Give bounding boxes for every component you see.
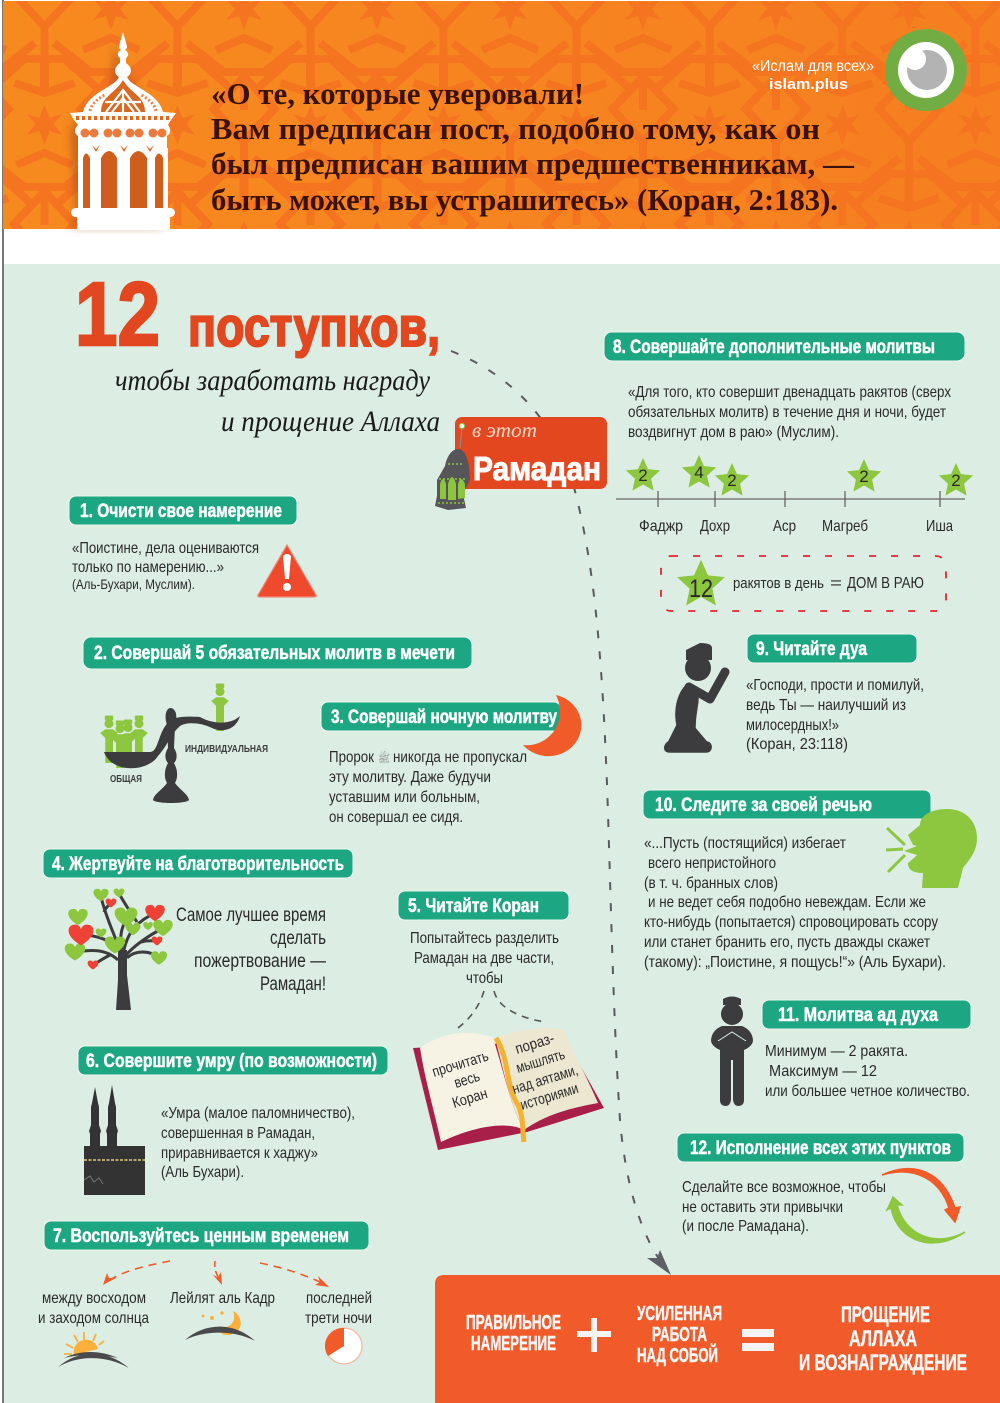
formula result: АЛЛАХА — [849, 1326, 917, 1351]
subtitle: чтобы заработать награду — [115, 364, 431, 397]
prayer timeline: Фаджр — [639, 518, 683, 535]
item 12 text: (и после Рамадана). — [682, 1218, 809, 1235]
item 12 — [677, 1133, 965, 1243]
item 7 labels: последней — [306, 1290, 372, 1307]
item 4 text: Самое лучшее время — [176, 905, 326, 926]
item 7 labels: и заходом солнца — [38, 1310, 149, 1327]
item 10 text: кто-нибудь (попытается) спровоцировать ссору — [644, 914, 938, 931]
callout: 12 rakats: 12 — [689, 575, 713, 603]
logo label: «Ислам для всех» — [752, 58, 874, 75]
icon: open book: прочитать — [430, 1048, 491, 1081]
item 10 — [643, 790, 977, 971]
formula part 1: НАМЕРЕНИЕ — [471, 1333, 556, 1355]
header banner — [3, 1, 1000, 230]
item 11 — [711, 996, 971, 1106]
item 3 — [321, 695, 581, 826]
item 6 text: совершенная в Рамадан, — [161, 1125, 315, 1142]
icon: sunrise — [58, 1332, 129, 1368]
quote text — [211, 76, 855, 217]
item 3 text — [329, 749, 527, 826]
item 10: 10. Следите за своей речью — [655, 795, 872, 816]
equals sign — [742, 1329, 774, 1351]
item 7 labels — [38, 1290, 372, 1327]
item 9 text: милосердных!» — [746, 717, 839, 734]
item 2: 2. Совершай 5 обязательных молитв в мечети — [94, 643, 455, 664]
formula part 1: ПРАВИЛЬНОЕ — [466, 1312, 561, 1334]
prayer timeline: 2 — [951, 471, 961, 490]
item 4 text: Рамадан! — [260, 974, 326, 995]
subtitle: и прощение Аллаха — [221, 405, 440, 438]
subtitle — [115, 364, 440, 438]
item 7 labels: трети ночи — [305, 1310, 372, 1327]
callout: 12 rakats — [661, 556, 946, 611]
prayer timeline: 2 — [638, 466, 648, 485]
icon: open book: весь — [452, 1068, 482, 1092]
Ramadan tag: в этот — [472, 418, 537, 442]
icon: open book: Коран — [450, 1085, 490, 1112]
dashed route arrow — [451, 351, 671, 1275]
item 7: 7. Воспользуйтесь ценным временем — [53, 1226, 349, 1247]
logo label: islam.plus — [769, 76, 848, 93]
item 1 text: «Поистине, дела оцениваются — [72, 540, 259, 557]
icon: night of power — [185, 1311, 255, 1341]
icon: standing person — [711, 996, 753, 1106]
icon: open book — [413, 1028, 604, 1150]
item 3 text: ﷺ — [378, 750, 390, 765]
item 12 text — [682, 1179, 886, 1235]
callout: 12 rakats: ДОМ В РАЮ — [847, 575, 924, 592]
logo label — [752, 58, 874, 93]
item 10 text: и не ведет себя подобно невеждам. Если же — [648, 894, 926, 911]
item 5 text — [410, 930, 559, 987]
icon: Kaaba and minarets — [84, 1085, 145, 1195]
item 6: 6. Совершите умру (по возможности) — [86, 1051, 377, 1072]
item 9 text — [746, 677, 924, 753]
callout: 12 rakats: = — [830, 575, 842, 592]
item 9 text: ведь Ты — наилучший из — [746, 697, 906, 714]
formula part 2 — [637, 1303, 722, 1367]
formula part 2: НАД СОБОЙ — [637, 1343, 718, 1367]
item 9 text: «Господи, прости и помилуй, — [746, 677, 924, 694]
prayer timeline — [616, 455, 973, 535]
item 5 text: Попытайтесь разделить — [410, 930, 559, 947]
item 8 — [604, 332, 973, 611]
formula result: ПРОЩЕНИЕ — [841, 1302, 930, 1327]
callout: 12 rakats: ракятов в день — [733, 575, 824, 592]
Ramadan tag: Рамадан — [473, 450, 601, 487]
item 8: 8. Совершайте дополнительные молитвы — [613, 337, 935, 358]
formula result — [799, 1302, 967, 1375]
prayer timeline: Аср — [773, 518, 796, 535]
item 6 text: «Умра (малое паломничество), — [161, 1105, 355, 1122]
item 9: 9. Читайте дуа — [756, 639, 867, 660]
Ramadan tag — [455, 417, 607, 489]
icon: open book: пораз- — [513, 1030, 556, 1058]
item 10 text: (такому): „Поистине, я пощусь!“» (Аль Бухари). — [644, 954, 946, 971]
item 1 text: только по намерению...» — [72, 559, 224, 576]
icon: open book: историями — [518, 1080, 581, 1114]
item 8 text: обязательных молитв) в течение дня и ночи, будет — [628, 404, 947, 421]
item 1: 1. Очисти свое намерение — [80, 501, 282, 522]
icon: lantern — [435, 428, 470, 510]
item 10 text: всего непристойного — [648, 855, 776, 872]
item 5: 5. Читайте Коран — [408, 896, 539, 917]
prayer timeline: Магреб — [822, 518, 868, 535]
icon: warning triangle — [258, 545, 316, 597]
plus sign — [577, 1318, 611, 1352]
item 6 text: (Аль Бухари). — [161, 1164, 244, 1181]
item 11 text — [765, 1043, 970, 1100]
item 9 — [664, 634, 924, 753]
title — [75, 265, 440, 365]
icon: kneeling person — [664, 643, 725, 753]
icon: scales with praying figures — [100, 684, 268, 803]
item 1 — [69, 496, 316, 597]
item 2 — [83, 637, 472, 803]
item 11 text: Минимум — 2 ракята. — [765, 1043, 908, 1060]
item 1 text — [72, 540, 259, 592]
item 5 text: чтобы — [466, 970, 503, 987]
item 8 text — [628, 384, 951, 441]
item 3 text: никогда не пропускал — [393, 749, 527, 766]
icon: logo circle — [885, 29, 967, 111]
icon: scales with praying figures: ИНДИВИДУАЛЬНАЯ — [185, 744, 268, 755]
quote text: «О те, которые уверовали! — [211, 76, 584, 111]
item 3 text: он совершал ее сидя. — [329, 809, 463, 826]
prayer timeline: Иша — [926, 518, 953, 535]
quote text: Вам предписан пост, подобно тому, как он — [211, 111, 820, 146]
item 4 text: сделать — [270, 928, 326, 949]
icon: speaking head — [886, 809, 977, 888]
title: 12 — [75, 265, 160, 365]
icon: scales with praying figures: ОБЩАЯ — [110, 774, 142, 785]
icon: last third pie — [325, 1328, 362, 1364]
prayer timeline: Дохр — [700, 518, 730, 535]
item 5 — [398, 891, 604, 1150]
item 11: 11. Молитва ад духа — [778, 1005, 938, 1026]
item 4: 4. Жертвуйте на благотворительность — [52, 854, 344, 875]
item 9 text: (Коран, 23:118) — [746, 736, 848, 753]
formula part 2: РАБОТА — [652, 1324, 707, 1346]
item 4 text: пожертвование — — [194, 951, 326, 972]
item 7 labels: между восходом — [42, 1290, 146, 1307]
item 8 text: воздвигнут дом в раю» (Муслим). — [628, 424, 839, 441]
item 3 text: уставшим или больным, — [329, 789, 480, 806]
icon: cycle arrows — [882, 1169, 965, 1243]
item 4 text — [176, 905, 326, 995]
item 12 text: Сделайте все возможное, чтобы — [682, 1179, 886, 1196]
icon: open book: мышлять — [514, 1046, 567, 1077]
item 10 text — [644, 835, 946, 971]
dashed branches — [455, 991, 545, 1030]
icon: open book: над аятами, — [510, 1062, 580, 1098]
item 6 text — [161, 1105, 355, 1181]
quote text: был предписан вашим предшественникам, — — [211, 146, 855, 181]
title: поступков, — [188, 295, 440, 358]
item 6 — [78, 1046, 388, 1195]
item 3: 3. Совершай ночную молитву — [331, 707, 557, 728]
item 10 text: (в т. ч. бранных слов) — [644, 875, 778, 892]
prayer timeline: 2 — [727, 471, 737, 490]
quote text: быть может, вы устрашитесь» (Коран, 2:183). — [211, 182, 838, 217]
item 3 text: Пророк — [329, 749, 375, 766]
item 4 — [43, 849, 353, 1010]
prayer timeline: 4 — [694, 463, 704, 482]
item 6 text: приравнивается к хаджу» — [161, 1145, 318, 1162]
item 11 text: Максимум — 12 — [769, 1063, 877, 1080]
icon: tree with hearts — [65, 888, 173, 1010]
formula part 1 — [466, 1312, 561, 1355]
item 10 text: или станет бранить его, пусть дважды скажет — [644, 934, 931, 951]
prayer timeline: 2 — [859, 467, 869, 486]
icon: crescent moon — [523, 695, 581, 756]
item 3 text: эту молитву. Даже будучи — [329, 769, 491, 786]
item 7 labels: Лейлят аль Кадр — [170, 1290, 275, 1307]
item 7 — [38, 1221, 372, 1368]
item 12 text: не оставить эти привычки — [682, 1199, 843, 1216]
result panel — [435, 1275, 1000, 1403]
icon: white gazebo — [70, 32, 176, 230]
item 5 text: Рамадан на две части, — [414, 950, 554, 967]
formula part 2: УСИЛЕННАЯ — [637, 1303, 722, 1325]
item 1 text: (Аль-Бухари, Муслим). — [72, 576, 195, 592]
dashed arrows — [103, 1261, 329, 1287]
item 10 text: «...Пусть (постящийся) избегает — [644, 835, 847, 852]
